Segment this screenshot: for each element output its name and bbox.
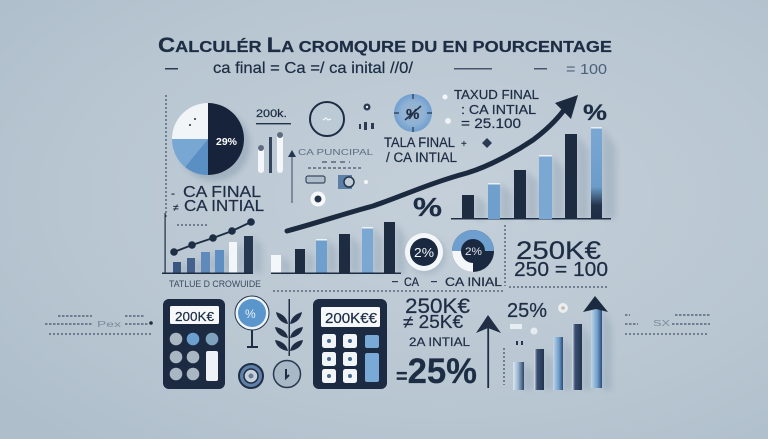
arrow up bbox=[476, 315, 501, 388]
label: Tala final / CA initial: / CA INTIAL bbox=[386, 150, 457, 165]
figure: 250K€ result bbox=[403, 295, 470, 349]
pie chart 29% bbox=[172, 103, 250, 181]
donut 2%: 2% bbox=[465, 246, 482, 258]
label: CA final / CA initial: CA FINAL bbox=[183, 184, 261, 201]
label: CA / CA initial: CA INIAL bbox=[445, 277, 503, 289]
label 25%: 25% bbox=[507, 300, 547, 322]
dotted frame lines bbox=[166, 95, 608, 385]
calculator left bbox=[163, 299, 225, 389]
small icons: capsule and ring bbox=[306, 175, 368, 206]
figure: 250K€ result: 250K€ bbox=[405, 295, 470, 318]
formula line: = 100 bbox=[566, 61, 607, 78]
side note right bbox=[625, 315, 710, 334]
label: CA final / CA initial bbox=[171, 184, 264, 215]
growth arrow bbox=[287, 95, 578, 231]
chart caption: TATLUE D CROWUIDE bbox=[169, 279, 261, 289]
200k label with mini bars bbox=[256, 108, 291, 173]
figure: 250K€ block: 250 = 100 bbox=[514, 259, 608, 281]
label: Taxud final: + bbox=[461, 139, 467, 150]
label: CA / CA initial: CA bbox=[404, 277, 419, 289]
large bar chart bbox=[451, 127, 616, 220]
label: CA final / CA initial: CA INTIAL bbox=[184, 198, 264, 215]
figure: 250K€ result: 2A INTIAL bbox=[409, 335, 470, 349]
rising bars with arrow bbox=[513, 296, 612, 390]
label: Tala final / CA initial: TALA FINAL bbox=[384, 135, 455, 150]
200k label with mini bars: 200k. bbox=[256, 108, 287, 120]
label: CA final / CA initial: ≠ bbox=[173, 203, 179, 214]
result =25%: =25% bbox=[396, 352, 477, 391]
small line and bar chart bbox=[162, 213, 262, 274]
label: CA final / CA initial: - bbox=[171, 186, 175, 200]
label: Taxud final bbox=[442, 88, 539, 150]
title: CALCULÉR LA CROMQURE DU EN POURCENTAGE bbox=[158, 34, 612, 57]
percent symbol top right: % bbox=[583, 100, 607, 125]
figure: 250K€ result: ≠ 25K€ bbox=[403, 312, 463, 332]
side note left bbox=[45, 316, 153, 334]
icon: timer bbox=[274, 360, 300, 388]
badge 2% ring: 2% bbox=[414, 246, 434, 260]
pie chart 29%: 29% bbox=[216, 137, 237, 148]
middle bar chart bbox=[271, 222, 405, 274]
side note left: Pex bbox=[97, 320, 121, 329]
label: Taxud final: TAXUD FINAL bbox=[454, 88, 539, 102]
calculator right: 200K€€ bbox=[325, 311, 377, 327]
icon: magnifier percent bbox=[235, 296, 269, 348]
percent symbol middle: % bbox=[413, 192, 442, 222]
formula line: ca final = Ca =/ ca inital //0/ bbox=[213, 60, 414, 77]
calculator right bbox=[313, 299, 387, 389]
side note right: SX bbox=[653, 319, 671, 328]
icon: plant bbox=[275, 299, 303, 356]
label: Taxud final: : CA INTIAL bbox=[461, 103, 536, 117]
figure: 250K€ block bbox=[514, 237, 608, 281]
label: Taxud final: = 25.100 bbox=[461, 115, 521, 131]
label: Tala final / CA initial bbox=[384, 135, 457, 165]
decorative dots bbox=[510, 303, 568, 345]
label: CA principal: CA PUNCIPAL bbox=[298, 147, 373, 157]
formula line bbox=[165, 60, 607, 78]
calculator left: 200K€ bbox=[175, 309, 215, 324]
figure: 250K€ block: 250K€ bbox=[516, 237, 601, 265]
donut 2% bbox=[452, 230, 494, 272]
icon: gear ring bbox=[239, 364, 263, 388]
icon: blue percent dial: % bbox=[406, 106, 419, 123]
label: CA / CA initial bbox=[392, 277, 503, 289]
icon: magnifier percent: % bbox=[245, 307, 256, 321]
icon: blue percent dial bbox=[394, 94, 432, 132]
label: CA principal bbox=[288, 147, 373, 203]
icon: clock bbox=[310, 102, 374, 136]
badge 2% ring bbox=[405, 233, 446, 274]
